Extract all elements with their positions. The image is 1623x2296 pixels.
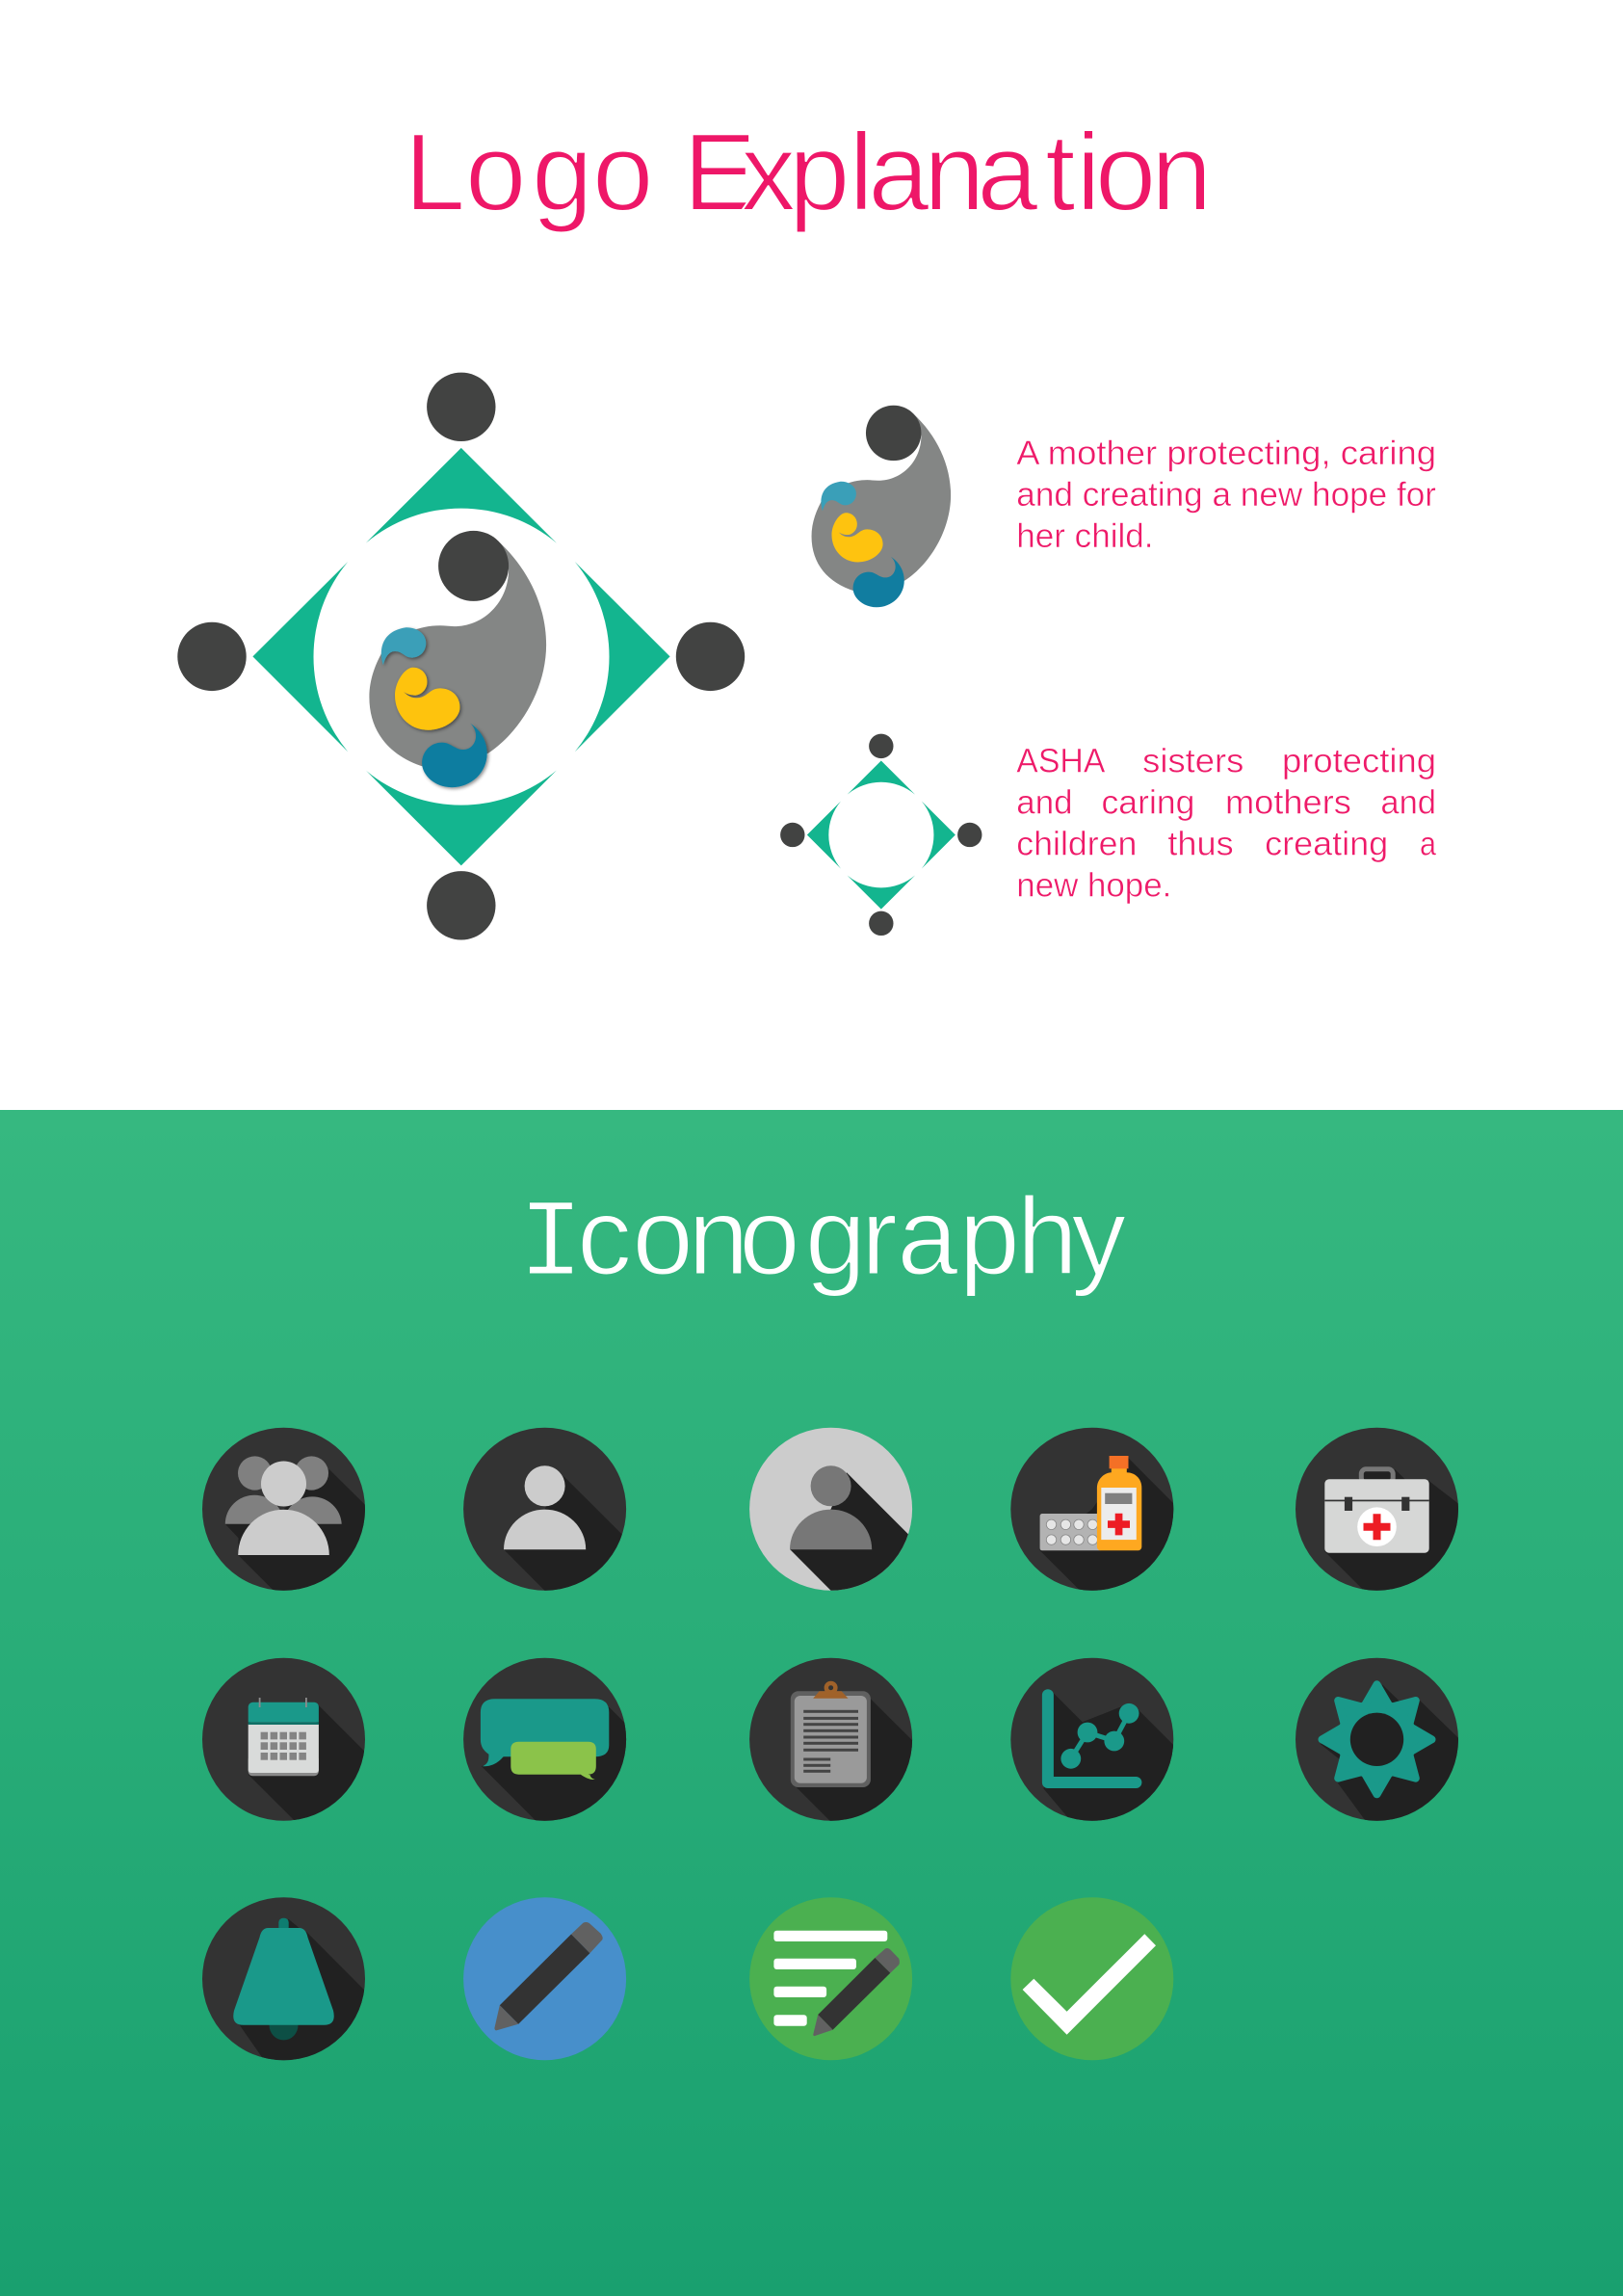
text: ASHA sisters explanation: a	[1420, 825, 1436, 863]
text: ASHA sisters explanation: caring	[1102, 782, 1194, 821]
icon: calendar	[202, 1657, 365, 1821]
small logo: ASHA ring	[780, 734, 982, 936]
icon: gear	[1296, 1657, 1458, 1821]
text: mother explanation: A mother protecting, caring	[1016, 434, 1436, 472]
icon: pencil on blue	[463, 1897, 626, 2060]
icon: bell	[202, 1897, 365, 2060]
text: ASHA sisters explanation: and	[1380, 782, 1436, 821]
text: ASHA sisters explanation: new hope.	[1016, 865, 1171, 904]
icon: line chart	[1010, 1657, 1173, 1821]
icon: single person	[463, 1428, 626, 1591]
logo: mother and child	[369, 531, 546, 787]
icon: list with pencil	[749, 1897, 912, 2060]
text: mother explanation: her child.	[1016, 516, 1154, 555]
text: ASHA sisters explanation: ASHA	[1016, 741, 1106, 779]
text: ASHA sisters explanation: creating	[1265, 825, 1388, 863]
light blue hand	[381, 627, 426, 665]
panel: logo explanation	[0, 0, 1623, 1110]
mother body	[369, 537, 546, 767]
panel: iconography	[0, 1110, 1623, 2296]
icon: medicine	[1010, 1428, 1173, 1591]
text: mother explanation: and creating a new hope for	[1016, 475, 1436, 514]
mother head	[438, 531, 509, 601]
icon: check mark	[1010, 1897, 1173, 2060]
text: ASHA sisters explanation: thus	[1167, 825, 1234, 863]
text: ASHA sisters explanation: mothers	[1225, 782, 1351, 821]
text: mother explanation	[1016, 434, 1436, 555]
large logo	[177, 373, 745, 940]
title: Logo Explanation: Ex	[683, 112, 796, 234]
title: Logo Explanation: planation	[789, 112, 1212, 234]
icon: chat bubbles	[463, 1657, 626, 1821]
yellow child	[395, 668, 460, 730]
text: ASHA sisters explanation: children	[1016, 825, 1137, 863]
icon: inverted person	[749, 1428, 913, 1591]
title: Logo Explanation: Logo	[405, 112, 686, 234]
dark blue hand	[422, 723, 487, 787]
logo: ASHA ring	[177, 373, 745, 940]
dots: four sisters	[177, 373, 745, 940]
icon: first aid kit	[1296, 1428, 1458, 1591]
small logo: mother	[812, 406, 951, 607]
icon: clipboard	[749, 1657, 913, 1821]
diamond segments	[252, 448, 670, 865]
text: ASHA sisters explanation	[1016, 741, 1436, 904]
text: ASHA sisters explanation: sisters	[1142, 741, 1243, 779]
icon: group of people	[202, 1428, 365, 1591]
text: ASHA sisters explanation: and	[1016, 782, 1073, 821]
bottle	[1097, 1456, 1141, 1550]
blister pack	[1040, 1514, 1102, 1550]
title: Iconography: I	[518, 1183, 584, 1308]
title: Iconography: conography	[577, 1175, 1126, 1299]
text: ASHA sisters explanation: protecting	[1282, 741, 1436, 779]
